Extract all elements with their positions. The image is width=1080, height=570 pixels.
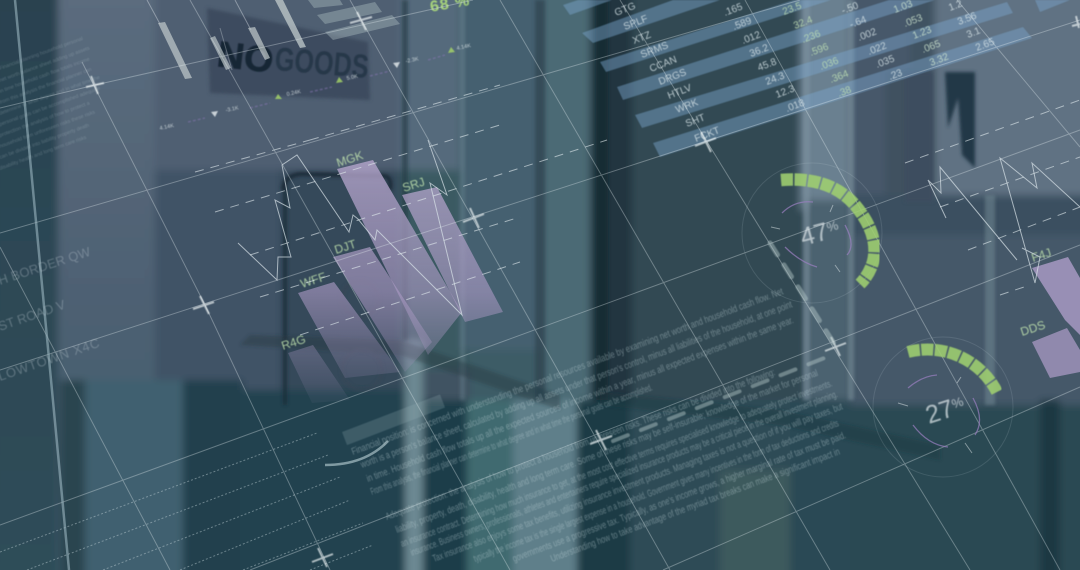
table column: values 4: .053 bbox=[902, 12, 925, 30]
table column: values 5: 3.56 bbox=[956, 10, 979, 28]
table column: values 2: .364 bbox=[828, 68, 851, 86]
bar labels: F4J bbox=[1030, 245, 1053, 265]
ticker row with triangles: 4.14K bbox=[159, 123, 175, 132]
bar labels: WFF bbox=[299, 270, 328, 291]
table column: tickers: SPLF bbox=[622, 14, 649, 33]
table column: values 5: 2.65 bbox=[974, 36, 997, 54]
table column: values 1: 45.8 bbox=[756, 56, 779, 74]
gauge: 47%: % bbox=[825, 217, 840, 235]
gauge: 27%: % bbox=[950, 394, 966, 412]
table column: tickers: SHT bbox=[684, 112, 707, 130]
table column: tickers: GTG bbox=[613, 1, 638, 19]
table column: values 2: .236 bbox=[800, 28, 823, 46]
table column: values 1: .012 bbox=[740, 29, 763, 47]
table column: values 5 bbox=[947, 0, 997, 54]
pale dashed segment through gauge bbox=[613, 243, 835, 441]
left small paragraph: personal goals can be accomplished adequate bbox=[0, 86, 101, 128]
sign: NO GOODS bbox=[207, 8, 370, 100]
paragraph two: Understanding how to take advantage of the myriad tax breaks can make a significant impact in bbox=[549, 447, 842, 565]
table column: tickers: FCKT bbox=[693, 125, 721, 145]
left small paragraph: household from unforeseen risks these risks bbox=[0, 109, 96, 150]
paragraph two: liability, property, death, disability, health and long term care. Some of these risks may be self-insurable; knowledge of the market for personal bbox=[394, 368, 820, 536]
paragraph two: governments use a progressive tax. Typically, as one's income grows, a higher marginal rate of tax must be paid. bbox=[511, 430, 848, 565]
purple bar chart bbox=[288, 160, 503, 403]
table column: tickers: SRMS bbox=[639, 40, 670, 61]
table column: tickers: DRGS bbox=[657, 67, 688, 88]
bar labels: DJT bbox=[333, 237, 358, 257]
paragraph two: insurance. Business owners, professionals, athletes and entertainers require specialized insurance products may be a critical piece in the overall investment planning. bbox=[409, 389, 839, 559]
paragraph two: Tax insurance also enjoys some tax benefits, utilizing insurance investment products. Managing taxes is not a question of if you will pay taxes, but bbox=[431, 401, 845, 565]
left small paragraph: determine to what degree and in what time the bbox=[0, 75, 101, 117]
ticker row with triangles: 4.14K bbox=[456, 43, 472, 52]
dashed reference lines bbox=[195, 85, 1080, 335]
paragraph one: From this analysis, the financial planner can determine to what degree and in what time the personal goals can be accomplished. bbox=[369, 382, 654, 498]
left street labels bbox=[0, 244, 101, 384]
table column: values 1: 36.2 bbox=[748, 42, 771, 60]
ticker row with triangles: 0.24K bbox=[286, 89, 302, 98]
table column: values 4: 3.32 bbox=[928, 51, 951, 69]
table column: values 2: 32.4 bbox=[792, 14, 815, 32]
left small paragraph: in time household cash flow totals income bbox=[0, 56, 91, 95]
paragraph one: worth is a person's balance sheet, calculated by adding up all assets under that person's control, minus all liabilities of the household, at one point bbox=[359, 299, 794, 471]
line chart right bbox=[928, 158, 1080, 283]
table column: tickers: CCAN bbox=[648, 54, 679, 75]
table column: values 2: .38 bbox=[836, 84, 853, 100]
ticker row with triangles: -2.3K bbox=[405, 56, 420, 65]
table column: values 3: .022 bbox=[866, 40, 889, 58]
table column: values 4 bbox=[892, 0, 951, 69]
table column: tickers: HTLV bbox=[666, 83, 694, 102]
table column: values 1: 12.3 bbox=[774, 83, 797, 101]
gauge: 27%: 27 bbox=[922, 394, 957, 430]
dotted lines lower left bbox=[0, 433, 373, 570]
table column: values 3: .23 bbox=[887, 67, 904, 83]
left small paragraph: net worth balance sheet adding up assets bbox=[0, 45, 91, 84]
table column: values 2: 23.5 bbox=[781, 0, 804, 18]
bar labels bbox=[280, 148, 1053, 353]
candlestick bars bbox=[147, 0, 306, 79]
table column: values 3: -.64 bbox=[848, 14, 869, 31]
left small paragraph: from this analysis the financial planner can bbox=[0, 67, 93, 106]
left small paragraph: Financial planning household personal bbox=[0, 36, 84, 72]
left small paragraph: disability health and long term care risks bbox=[0, 135, 88, 172]
table column: values 4: 1.23 bbox=[911, 24, 934, 42]
sign: NO GOODS: GOODS bbox=[273, 40, 370, 85]
paragraph one: Financial position: is concerned with understanding the personal resources available by examining net worth and household cash flow. Net bbox=[350, 286, 785, 458]
left small paragraph bbox=[0, 36, 101, 172]
sign: NO GOODS: NO bbox=[215, 33, 276, 81]
table column: tickers bbox=[613, 1, 721, 145]
table column: values 5: 3.1 bbox=[965, 25, 982, 41]
table column: values 1: 24.3 bbox=[764, 70, 787, 88]
table column: values 2: .036 bbox=[818, 55, 841, 73]
gauge: 27% bbox=[873, 337, 1013, 477]
bar labels: MGK bbox=[335, 148, 365, 170]
bright vertical edge line bbox=[15, 0, 69, 570]
table column: values 3: .002 bbox=[856, 26, 879, 44]
gauge: 47%: 47 bbox=[797, 218, 831, 252]
left small paragraph: protection the analysis of how to protect a bbox=[0, 100, 91, 139]
top small stat blocks bbox=[308, 0, 400, 40]
bar labels: R4G bbox=[280, 332, 307, 353]
table column: values 1: .165 bbox=[722, 1, 745, 19]
ticker row with triangles bbox=[159, 43, 472, 132]
table column: values 2: .596 bbox=[808, 41, 831, 59]
paragraph two: typically the income tax is the single largest expense in a household. Government gives many incentives in the form of tax deductions and credits bbox=[472, 418, 840, 565]
background detail: window figure and glass edges bbox=[240, 0, 995, 460]
paragraph block bbox=[342, 286, 848, 565]
table column: values 4: .065 bbox=[920, 38, 943, 56]
bar labels: DDS bbox=[1019, 318, 1047, 339]
line chart left bbox=[238, 140, 462, 315]
table column: tickers: XTZ bbox=[631, 30, 653, 47]
table column: values 1 bbox=[722, 1, 807, 115]
paragraph one: in time. Household cash flow totals up all the expected sources of income within a year, minus all expected expenses within the same year. bbox=[365, 315, 795, 485]
gauge: 47% bbox=[742, 163, 882, 303]
table column: values 2 bbox=[781, 0, 853, 100]
table column: values 3 bbox=[840, 0, 904, 83]
table column: values 1: .589 bbox=[731, 15, 754, 33]
data table values bbox=[613, 0, 997, 145]
left small paragraph: can be divided into liability property death bbox=[0, 123, 90, 161]
table column: values 1: .018 bbox=[784, 97, 807, 115]
table column: values 3: .035 bbox=[874, 53, 897, 71]
purple bars right edge bbox=[1032, 257, 1080, 378]
data table bars bbox=[563, 0, 1070, 157]
ticker row with triangles: -3.1K bbox=[225, 105, 240, 114]
table column: values 3: -.50 bbox=[840, 0, 861, 17]
paragraph two bbox=[384, 367, 848, 565]
paragraph two: Adequate protection: the analysis of how to protect a household from unforeseen risks. These risks can be divided into the following: bbox=[384, 367, 777, 523]
paragraph two: an insurance contract. Determining how much insurance to get, at the most cost effective terms requires specialised knowledge to adequately protect investments. bbox=[399, 378, 834, 550]
bar labels: SRJ bbox=[401, 175, 426, 195]
table column: tickers: WRK bbox=[674, 97, 700, 116]
ticker row with triangles: 5.0K bbox=[346, 74, 359, 82]
arrow: curved swoosh by paragraph bbox=[325, 441, 388, 465]
